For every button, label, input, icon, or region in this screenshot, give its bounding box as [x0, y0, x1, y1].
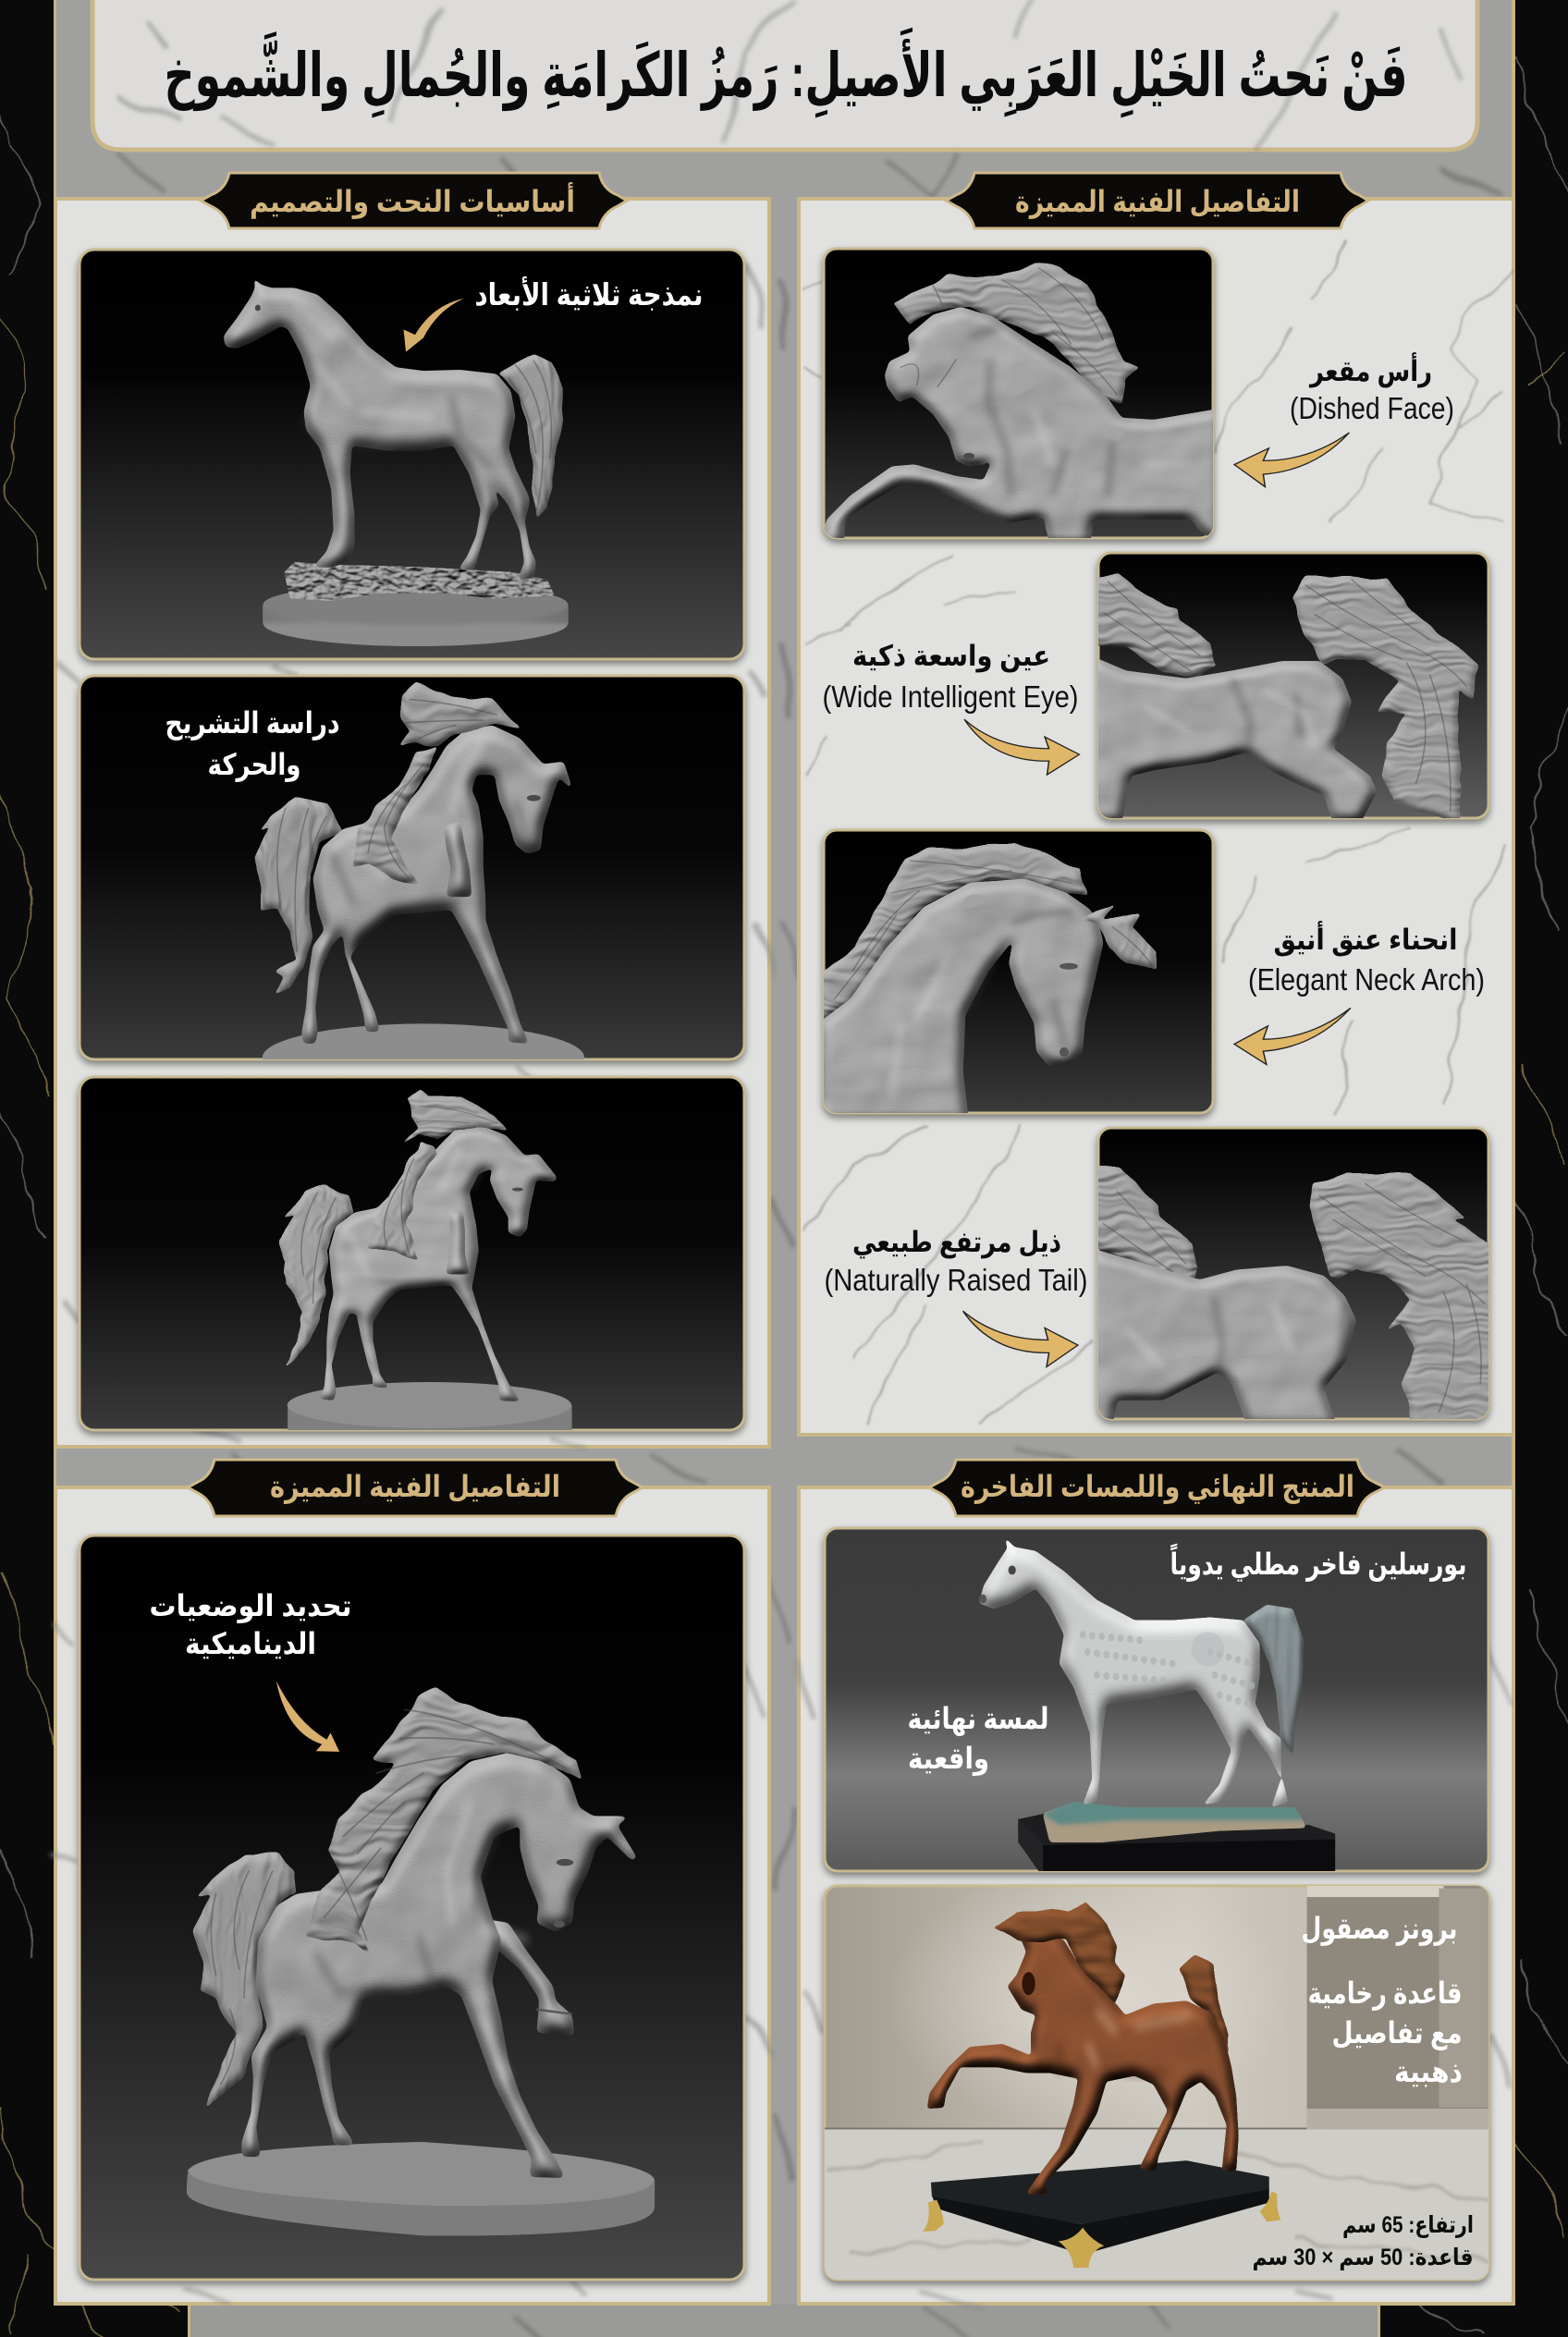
- gold feet: [923, 2191, 1281, 2268]
- label: marble base with gold details: قاعدة رخامية: [1307, 1976, 1463, 2011]
- label: dynamic poses: الديناميكية: [185, 1627, 316, 1660]
- horse: large prancing model: [187, 1686, 655, 2235]
- arrow: to large horse: [276, 1681, 339, 1752]
- banner: artistic details bottom-left: [188, 1460, 643, 1516]
- label: 3D modelling: نمذجة ثلاثية الأبعاد: [475, 275, 703, 312]
- horse: head close-up: [818, 264, 1223, 546]
- callout: neck arch: انحناء عنق أنيق: [1274, 921, 1457, 957]
- title panel: [92, 0, 1477, 150]
- label: dynamic poses: تحديد الوضعيات: [150, 1589, 351, 1623]
- callout: dished face: [1234, 352, 1454, 487]
- card: prancing pose: [80, 1077, 744, 1442]
- label: anatomy study: دراسة التشريح: [165, 706, 340, 740]
- callout: raised tail: (Naturally Raised Tail): [825, 1263, 1087, 1297]
- banner: artistic details bottom-left: التفاصيل الفنية المميزة: [270, 1470, 560, 1504]
- horse: standing grey model: [224, 275, 569, 646]
- label: anatomy study: [165, 706, 340, 782]
- card: hindquarters: [1089, 553, 1488, 823]
- banner: final product: المنتج النهائي واللمسات الفاخرة: [961, 1470, 1354, 1504]
- label: marble base with gold details: ذهبية: [1394, 2055, 1463, 2088]
- label: polished bronze: برونز مصقول: [1302, 1912, 1457, 1946]
- callout: wide eye: [823, 640, 1079, 775]
- card: raised tail: [1089, 1128, 1503, 1428]
- card: anatomy and movement: [80, 676, 744, 1091]
- banner: artistic details right: التفاصيل الفنية المميزة: [1015, 185, 1300, 219]
- horse: raised tail close-up: [1089, 1164, 1503, 1428]
- label: porcelain: بورسلين فاخر مطلي يدوياً: [1170, 1543, 1466, 1582]
- horse: painted porcelain statue: [979, 1538, 1335, 1877]
- label: realistic finish: واقعية: [908, 1742, 989, 1776]
- arrow: to tail: [964, 719, 1079, 775]
- callout: wide eye: عين واسعة ذكية: [852, 640, 1050, 673]
- horse: prancing grey model: [253, 684, 584, 1091]
- scene: gallery and bronze statue: [824, 1866, 1496, 2285]
- card: dished face: [818, 249, 1223, 546]
- panel: sculpting basics: [55, 199, 769, 1447]
- arrow: to head: [1234, 433, 1349, 487]
- banner: artistic details right: [946, 173, 1368, 228]
- panel: artistic details: [799, 199, 1513, 1435]
- label: anatomy study: والحركة: [207, 748, 301, 782]
- callout: wide eye: (Wide Intelligent Eye): [823, 679, 1078, 714]
- horse: smaller prancing model: [278, 1088, 572, 1442]
- label: dynamic poses: [150, 1589, 351, 1660]
- card: porcelain: [825, 1528, 1488, 1877]
- card: standing 3D model: [80, 250, 744, 659]
- label: realistic finish: لمسة نهائية: [908, 1702, 1048, 1736]
- callout: raised tail: [825, 1226, 1087, 1367]
- label: marble base with gold details: مع تفاصيل: [1331, 2016, 1463, 2050]
- label: dimensions: ارتفاع: 65 سم: [1342, 2212, 1474, 2238]
- banner: sculpting basics: أساسيات النحت والتصميم: [250, 182, 575, 219]
- card: dynamic pose: [80, 1536, 744, 2280]
- marble plinth: [931, 2160, 1269, 2255]
- label: dimensions: [1252, 2212, 1474, 2270]
- label: realistic finish: [908, 1702, 1048, 1776]
- label: dimensions: قاعدة: 50 سم × 30 سم: [1252, 2245, 1474, 2270]
- callout: neck arch: (Elegant Neck Arch): [1248, 962, 1485, 997]
- callout: dished face: رأس مقعر: [1308, 352, 1432, 388]
- label: marble base with gold details: [1307, 1976, 1463, 2088]
- arrow: to neck: [1234, 1008, 1351, 1065]
- horse: tail close-up: [1089, 573, 1478, 823]
- horse: neck close-up: [818, 843, 1156, 1123]
- callout: raised tail: ذيل مرتفع طبيعي: [852, 1226, 1061, 1259]
- callout: neck arch: [1234, 921, 1485, 1065]
- arrow: to raised tail: [963, 1311, 1078, 1367]
- banner: sculpting basics: [201, 173, 627, 228]
- banner: final product: [929, 1460, 1385, 1516]
- arrow: to model: [404, 299, 464, 352]
- callout: dished face: (Dished Face): [1290, 391, 1454, 425]
- card: neck arch: [818, 830, 1213, 1123]
- panel: dynamic pose: [55, 1487, 769, 2304]
- panel: final product: [799, 1487, 1513, 2304]
- card: bronze: [824, 1866, 1496, 2285]
